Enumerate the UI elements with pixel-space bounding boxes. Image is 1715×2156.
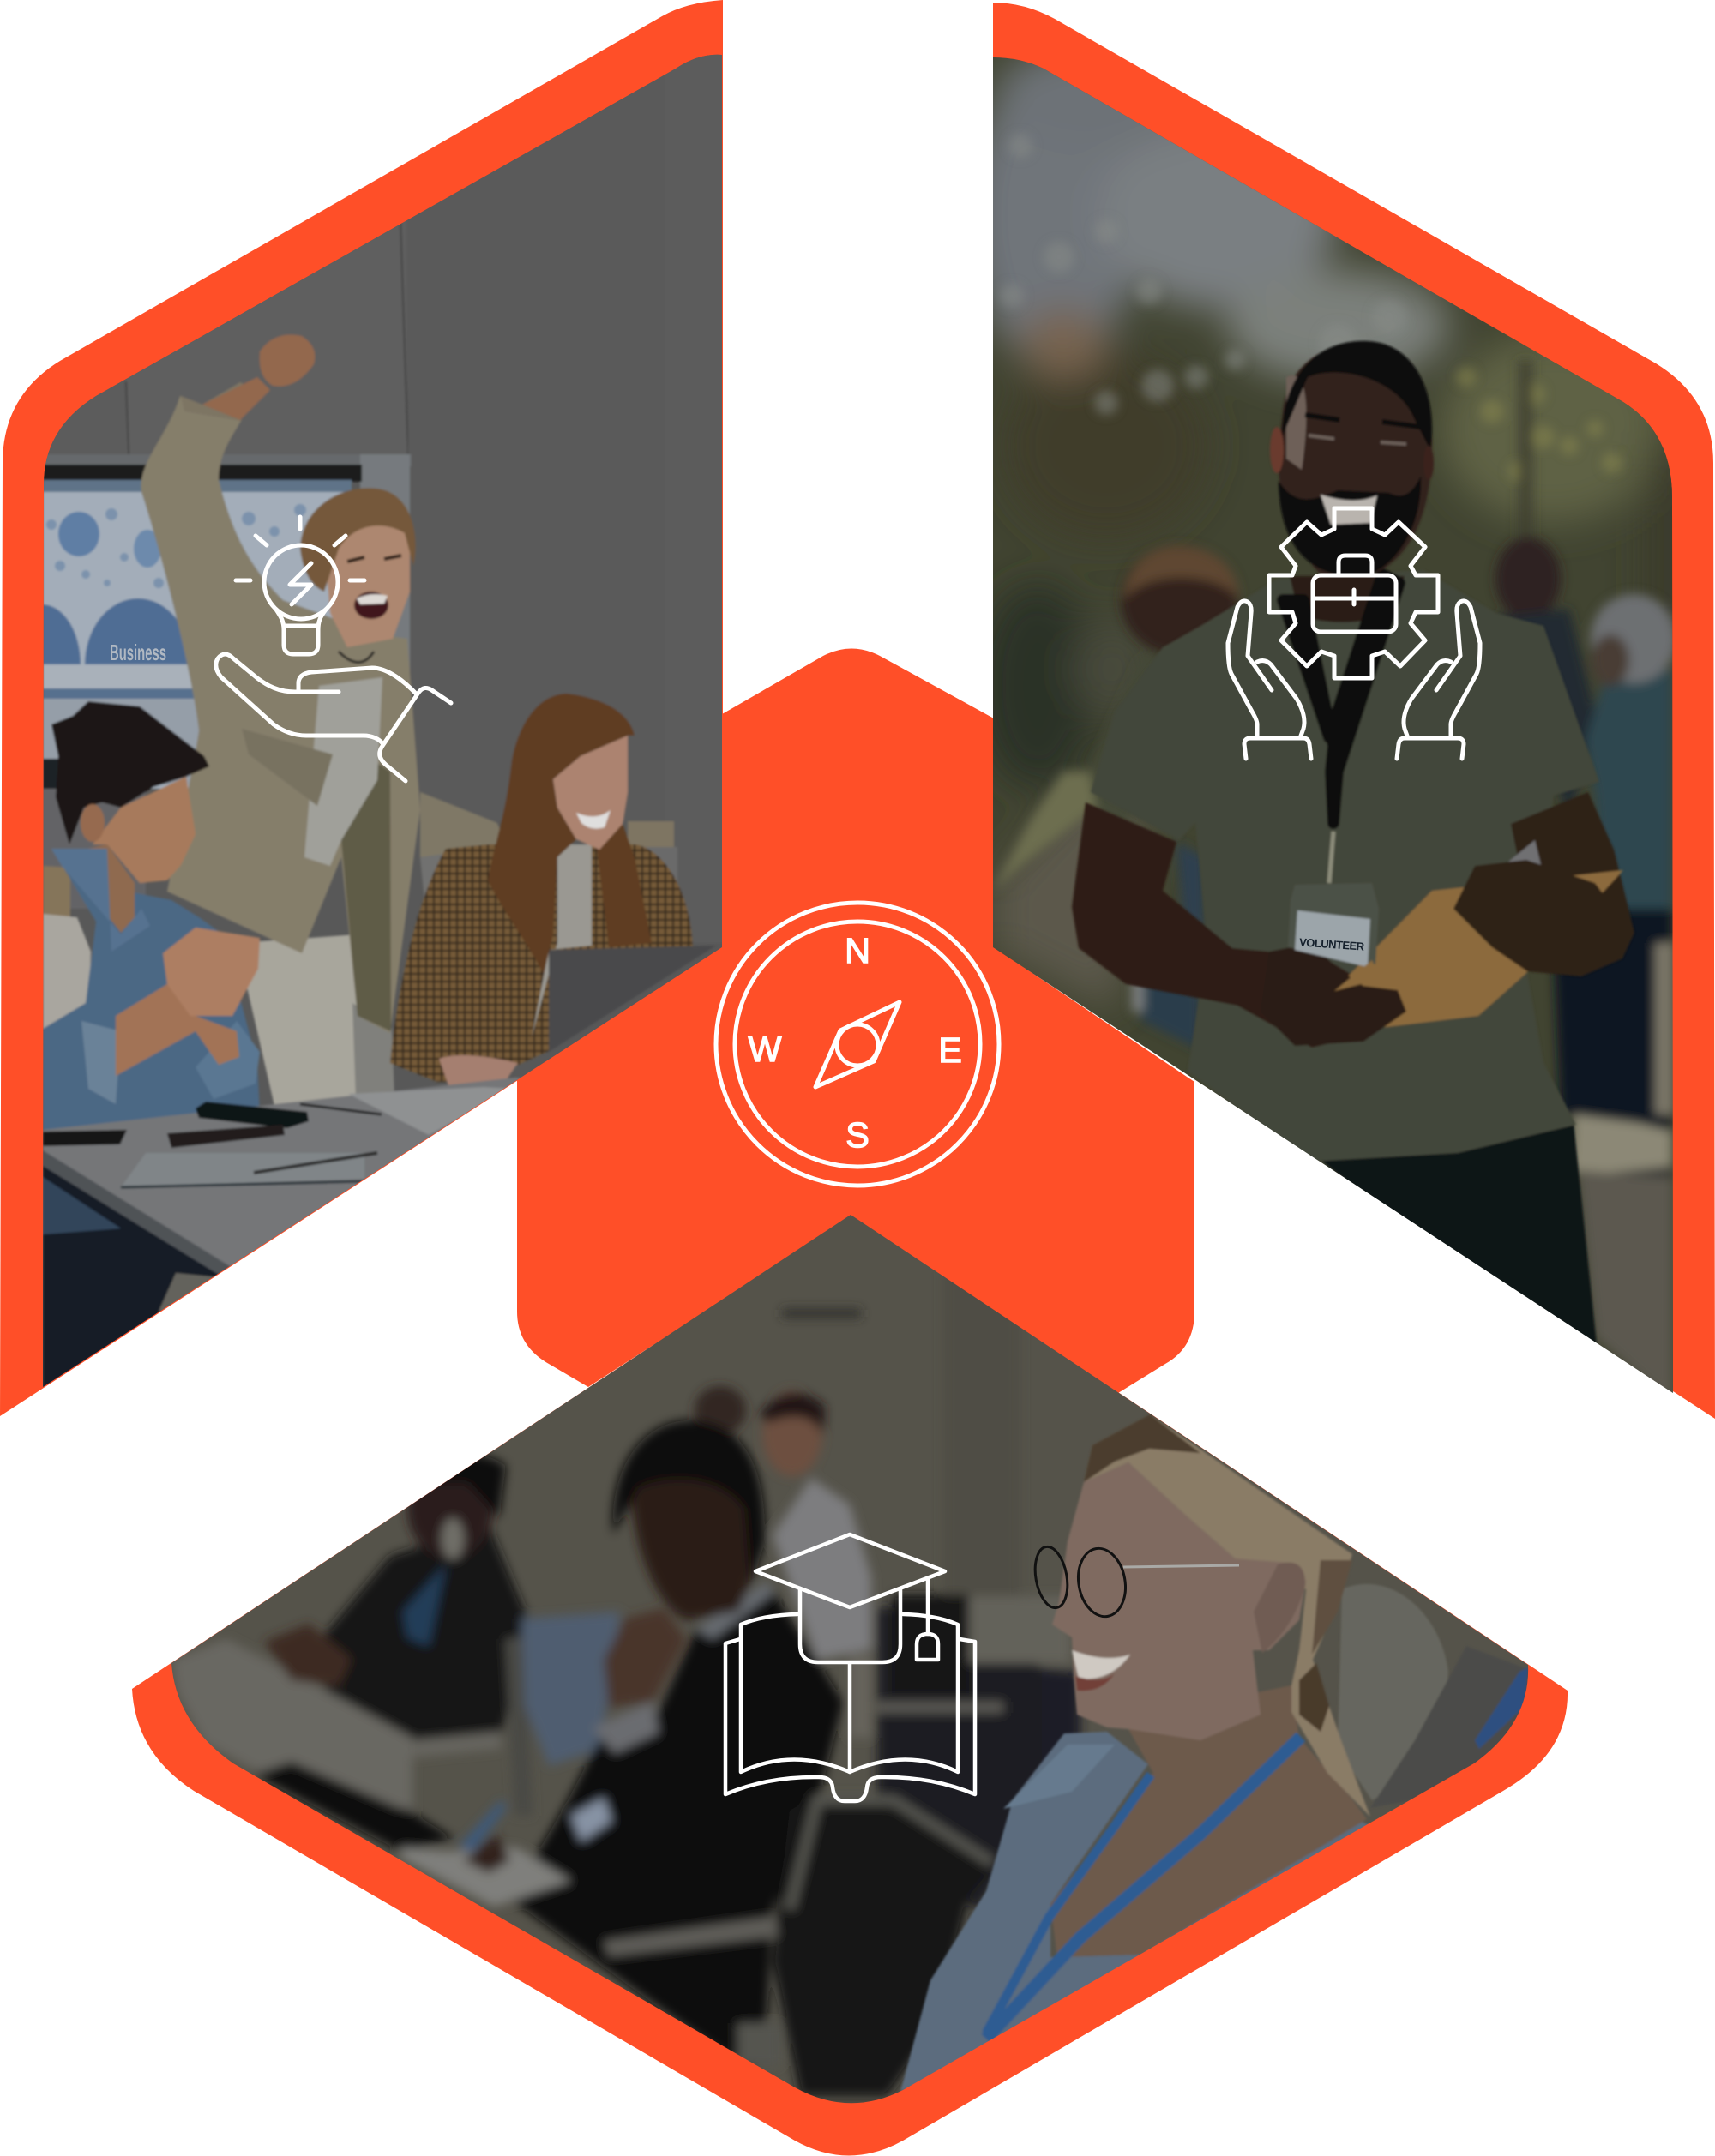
background people bbox=[1121, 545, 1237, 655]
icon: graduation cap on open book bbox=[725, 1534, 975, 1801]
compass letters: W bbox=[749, 1030, 782, 1069]
left arm bbox=[1072, 802, 1406, 1048]
clipboard bbox=[1334, 870, 1623, 1029]
shirt bbox=[1091, 570, 1599, 1162]
panel: left hexagon orange frame bbox=[0, 0, 723, 1416]
photo: seminar audience bbox=[129, 1200, 1586, 2143]
compass letters: S bbox=[845, 1115, 870, 1155]
face bbox=[1052, 1462, 1306, 1740]
panel: centre hexagon bbox=[517, 648, 1194, 1393]
panel: right hexagon orange frame bbox=[993, 3, 1715, 1419]
briefcase bbox=[1313, 575, 1396, 632]
compass letters: N bbox=[845, 931, 870, 970]
panelling near woman bbox=[628, 821, 674, 847]
compass letters: E bbox=[938, 1030, 962, 1070]
compass letters bbox=[749, 931, 962, 1155]
left man bbox=[43, 866, 70, 917]
right hand bbox=[1397, 601, 1480, 759]
screen label: Business: Business bbox=[110, 640, 166, 665]
icon: hand holding lightbulb bbox=[216, 517, 451, 781]
badge bbox=[1288, 883, 1379, 964]
centre man black bbox=[510, 1582, 844, 2075]
lanyards bbox=[986, 1737, 1301, 2039]
neck bbox=[1290, 576, 1405, 622]
notebook bbox=[401, 1847, 571, 1907]
skin: neck and chest bbox=[1050, 1685, 1367, 1957]
gear bbox=[1269, 508, 1438, 678]
lanyard bbox=[1283, 574, 1399, 823]
screen bbox=[43, 465, 362, 482]
trousers bbox=[1312, 1123, 1597, 1346]
left woman black bbox=[325, 1525, 533, 1816]
back people bbox=[695, 1386, 746, 1434]
table and below bbox=[43, 1077, 521, 1267]
right arm bbox=[1458, 792, 1634, 976]
badge label: VOLUNTEER: VOLUNTEER bbox=[1299, 935, 1365, 953]
chair bbox=[773, 1795, 992, 2096]
icon: hands holding gear with briefcase bbox=[1228, 508, 1480, 759]
glasses bbox=[1031, 1544, 1239, 1620]
photo: volunteer bbox=[969, 43, 1689, 1414]
right people bbox=[1338, 1584, 1448, 1800]
head bbox=[1278, 343, 1432, 574]
photo: team celebrating bbox=[43, 55, 722, 1387]
icon: compass bbox=[716, 903, 999, 1186]
right woman bbox=[390, 844, 693, 1082]
panel: bottom hexagon orange frame bbox=[132, 1215, 1568, 2155]
shirt bbox=[900, 1732, 1372, 2092]
hair bbox=[1084, 1414, 1370, 1817]
standing woman bbox=[420, 792, 508, 857]
compass needle bbox=[815, 1002, 900, 1087]
left hand bbox=[1228, 601, 1311, 759]
